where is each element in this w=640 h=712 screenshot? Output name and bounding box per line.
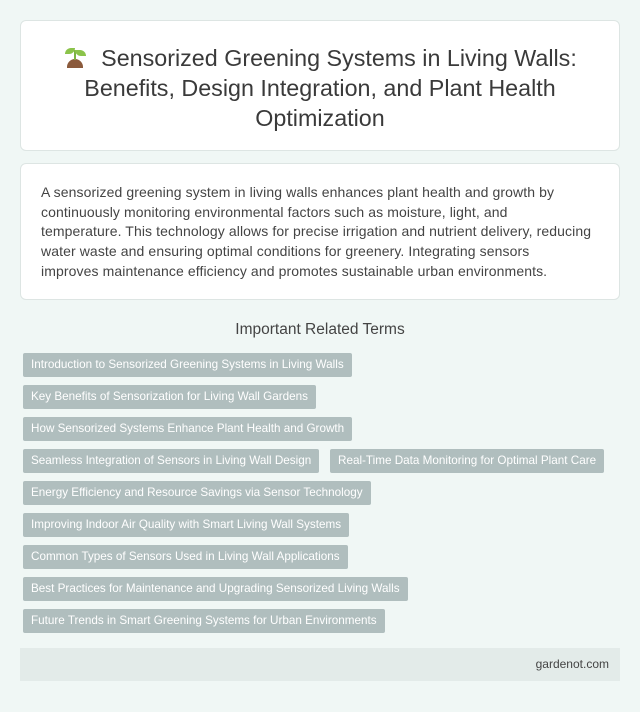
tag: Real-Time Data Monitoring for Optimal Plant Care	[338, 454, 596, 467]
footer: gardenot.com	[536, 657, 609, 671]
tag: Improving Indoor Air Quality with Smart Living Wall Systems	[31, 518, 341, 531]
title panel	[20, 20, 620, 151]
tag	[330, 449, 604, 473]
tag: How Sensorized Systems Enhance Plant Health and Growth	[31, 422, 344, 435]
tag	[23, 513, 349, 537]
description text: water waste and ensuring optimal conditions for greenery. Integrating sensors	[41, 243, 529, 259]
tag: Common Types of Sensors Used in Living Wall Applications	[31, 550, 340, 563]
tag: Future Trends in Smart Greening Systems for Urban Environments	[31, 614, 377, 627]
tag	[23, 577, 408, 601]
tag	[23, 609, 385, 633]
description text: temperature. This technology allows for precise irrigation and nutrient delivery, reducing	[41, 223, 591, 239]
description text: improves maintenance efficiency and promotes sustainable urban environments.	[41, 263, 547, 279]
tag	[23, 545, 348, 569]
tag: Energy Efficiency and Resource Savings via Sensor Technology	[31, 486, 363, 499]
heading: related terms: Important Related Terms	[235, 321, 405, 338]
tag: Seamless Integration of Sensors in Living Wall Design	[31, 454, 311, 467]
icon: sprout	[65, 48, 86, 68]
tag	[23, 385, 316, 409]
footer	[20, 648, 620, 681]
tag	[23, 353, 352, 377]
tag	[23, 417, 352, 441]
title: Sensorized Greening Systems in Living Walls: Benefits, Design Integration, and Plant Health Optimization	[84, 45, 577, 131]
description panel	[20, 163, 620, 300]
description text	[41, 184, 591, 279]
tag: Key Benefits of Sensorization for Living Wall Gardens	[31, 390, 308, 403]
description text: A sensorized greening system in living walls enhances plant health and growth by	[41, 184, 554, 200]
tag: Introduction to Sensorized Greening Systems in Living Walls	[31, 358, 344, 371]
tag	[23, 449, 319, 473]
description text: continuously monitoring environmental factors such as moisture, light, and	[41, 204, 508, 220]
tag: Best Practices for Maintenance and Upgrading Sensorized Living Walls	[31, 582, 400, 595]
tag	[23, 481, 371, 505]
